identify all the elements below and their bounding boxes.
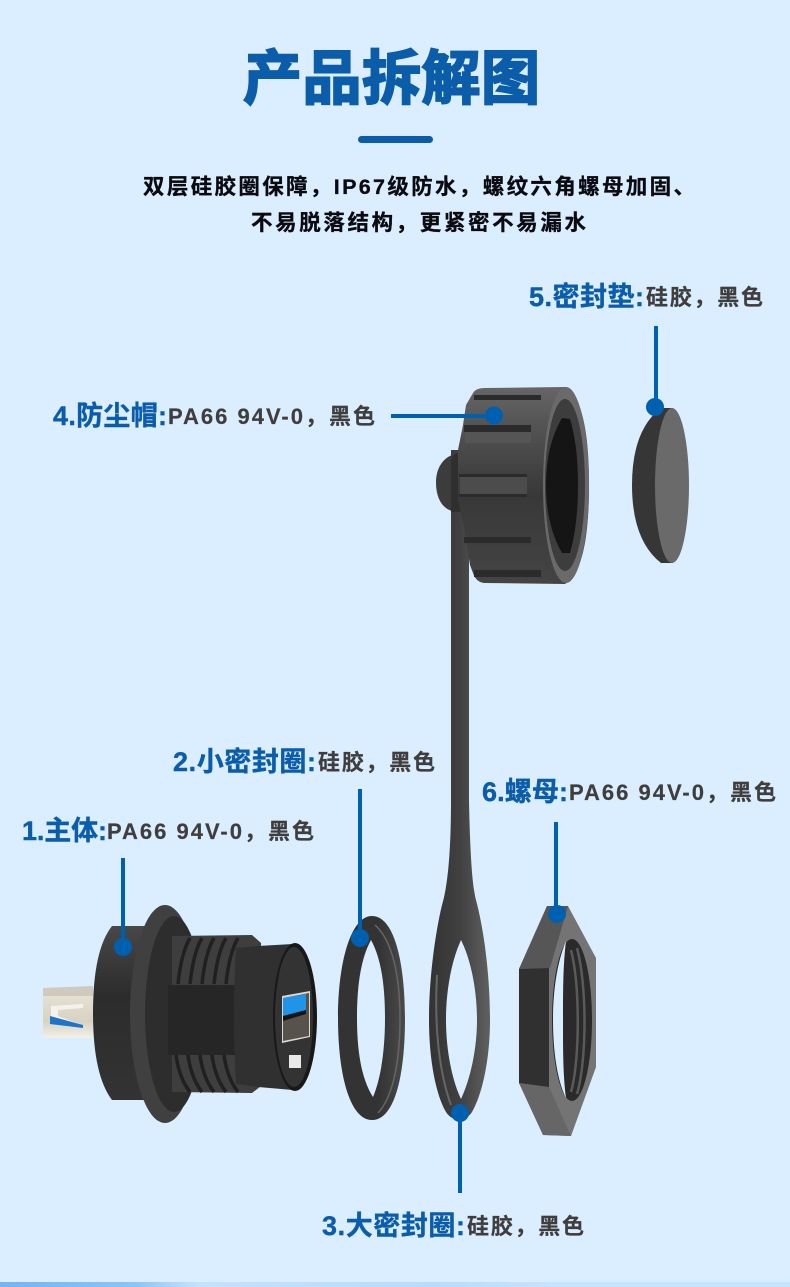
part: hex nut (6) — [519, 906, 596, 1136]
nut threads — [571, 948, 584, 1094]
cap opening — [546, 418, 578, 553]
nut upper facet — [519, 906, 568, 969]
cap grooves — [464, 395, 541, 577]
bottom gradient band — [0, 1282, 790, 1287]
usb blue tongue — [283, 994, 306, 1016]
part: small seal ring (2) — [338, 916, 405, 1120]
label 6: PA66 94V-0，黑色 — [569, 780, 776, 805]
nut bore — [552, 939, 592, 1101]
label 6: 6.螺母: — [482, 777, 568, 807]
label 3 — [322, 1210, 584, 1241]
usb marking — [289, 1055, 301, 1068]
part: dust cap (4) — [436, 387, 589, 584]
thread ribs — [176, 938, 238, 1092]
title underline bar — [358, 136, 433, 143]
cap front rim — [543, 387, 589, 583]
label 3: 3.大密封圈: — [322, 1210, 465, 1241]
leader: 2 — [351, 789, 369, 947]
label 4: PA66 94V-0，黑色 — [168, 404, 375, 429]
intro text: 不易脱落结构，更紧密不易漏水 — [251, 210, 586, 235]
label 3: 硅胶，黑色 — [467, 1214, 584, 1239]
label 5: 5.密封垫: — [529, 281, 644, 312]
front collar — [234, 944, 293, 1090]
threaded barrel — [172, 935, 261, 1093]
part: main body (1) — [43, 905, 317, 1123]
leader: 4 — [391, 406, 503, 424]
intro text: 双层硅胶圈保障，IP67级防水，螺纹六角螺母加固、 — [143, 175, 695, 199]
label 1 — [22, 816, 314, 846]
title: 产品拆解图 — [243, 46, 540, 112]
rear cylinder — [93, 926, 145, 1100]
leader: 3 — [451, 1104, 469, 1193]
barrel flat — [168, 985, 238, 1055]
front face — [273, 943, 317, 1091]
label 2: 2.小密封圈: — [173, 746, 316, 777]
cap knob — [436, 455, 452, 511]
usb metal tail — [43, 986, 93, 996]
label 6 — [482, 777, 776, 807]
intro text — [143, 175, 695, 235]
flange — [130, 905, 200, 1123]
nut lower facet — [519, 1083, 571, 1136]
cap body — [458, 387, 589, 584]
usb port — [282, 991, 310, 1043]
nut dark side face — [519, 968, 549, 1087]
label 4 — [53, 401, 375, 431]
label 2 — [173, 746, 435, 777]
label 5: 硅胶，黑色 — [646, 285, 763, 310]
label 1: 1.主体: — [22, 816, 107, 846]
label 5 — [529, 281, 763, 312]
leader: 1 — [114, 858, 132, 956]
label 2: 硅胶，黑色 — [318, 750, 435, 775]
part: seal pad (5) — [632, 408, 689, 563]
leader: 5 — [646, 326, 664, 416]
leader: 6 — [548, 822, 566, 923]
label 4: 4.防尘帽: — [53, 401, 167, 431]
label 1: PA66 94V-0，黑色 — [107, 819, 314, 844]
part: tether strap with loop — [429, 450, 490, 1120]
